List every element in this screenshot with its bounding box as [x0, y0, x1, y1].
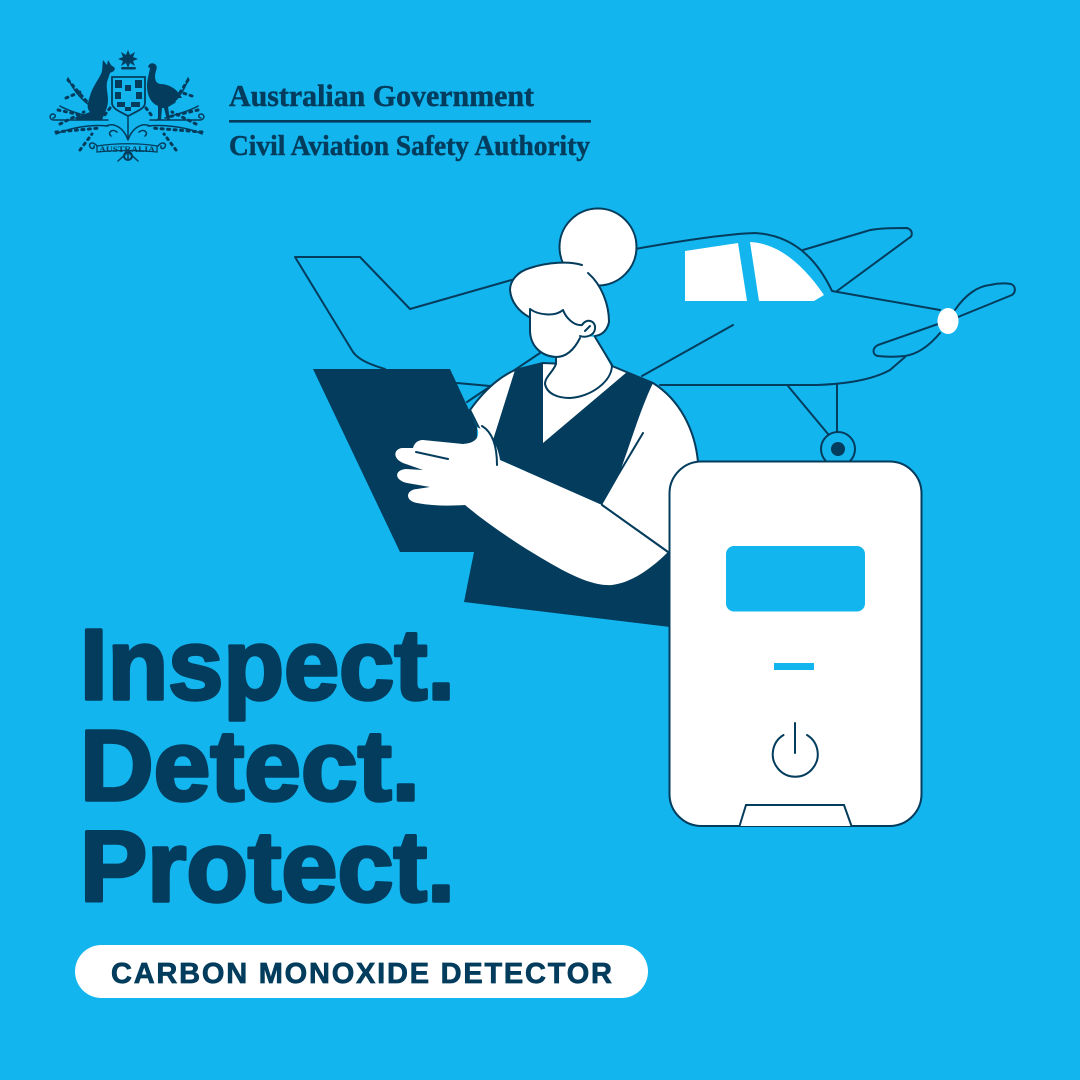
logo text: Australian Government: Australian Government [229, 78, 535, 113]
headline line: Protect.: Protect. [80, 811, 455, 923]
banner: AUSTRALIA: AUSTRALIA [99, 144, 156, 154]
ear [580, 321, 595, 337]
pill label [75, 945, 648, 998]
hair bun [560, 208, 636, 286]
shoulders and shirt [470, 363, 698, 580]
aircraft propeller blades [955, 283, 1015, 317]
headline line: Inspect.: Inspect. [80, 609, 455, 721]
detector screen [726, 546, 865, 612]
neck and collar [545, 335, 612, 398]
torso base [460, 470, 670, 627]
illustration: light aircraft [295, 228, 1015, 466]
aircraft cockpit windows [685, 243, 747, 301]
pill text: CARBON MONOXIDE DETECTOR [111, 958, 612, 990]
arm and hand lines [416, 426, 668, 552]
aircraft landing gear [788, 385, 837, 434]
logo text: Civil Aviation Safety Authority: Civil Aviation Safety Authority [229, 130, 590, 162]
detector indicator bar [774, 663, 814, 670]
hair [510, 262, 609, 336]
clipboard [313, 369, 477, 552]
vest [493, 362, 653, 505]
detector body [670, 462, 922, 826]
detector foot [740, 805, 852, 826]
sleeve crease [618, 433, 643, 475]
logo: Australian Government, Civil Aviation Safety Authority [50, 50, 591, 162]
forearm and hand [395, 427, 668, 585]
headline line: Detect.: Detect. [80, 710, 420, 822]
aircraft wing [803, 228, 912, 291]
aircraft tail and fuselage outline [295, 257, 515, 369]
aircraft propeller hub [938, 308, 958, 334]
face [530, 309, 582, 357]
icon: coat of arms [50, 50, 204, 161]
headline [80, 609, 455, 923]
carbon monoxide detector [670, 462, 922, 826]
illustration: woman with clipboard [313, 208, 698, 627]
icon: power symbol [773, 723, 818, 777]
pill background [75, 945, 648, 998]
